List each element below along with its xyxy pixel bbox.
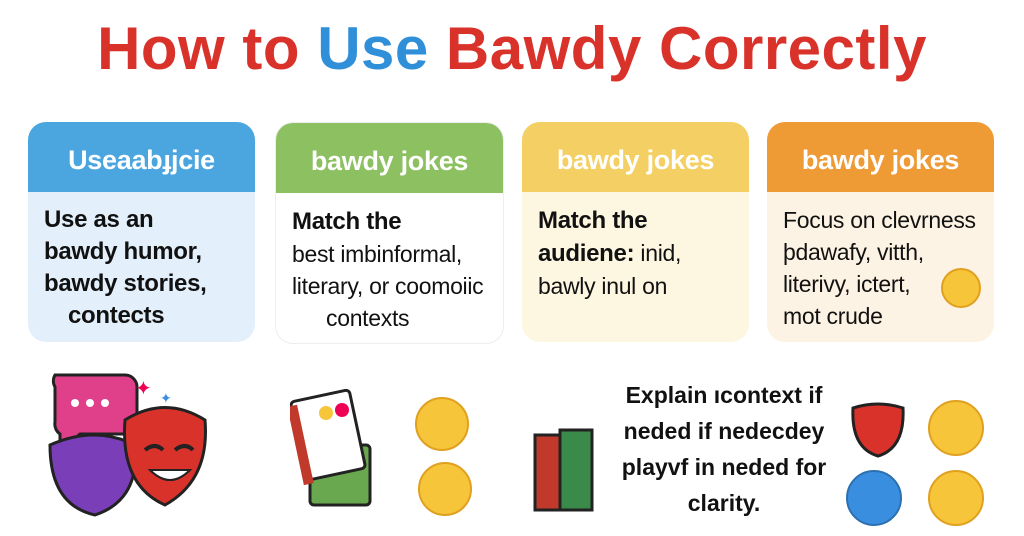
icon: laughing emoji — [928, 400, 984, 456]
text: explain: clarity. — [688, 490, 760, 516]
text: explain: neded if nedecdey — [624, 418, 824, 444]
icon: masks and speech bubble: ✦ — [160, 390, 172, 406]
text: yellow: Match the — [538, 207, 647, 234]
text: orange: mot crude — [783, 303, 883, 329]
text: green — [292, 208, 483, 331]
text: blue: Use as an — [44, 206, 153, 233]
text: orange — [783, 207, 976, 329]
text: green: contexts — [326, 305, 409, 331]
header: orange — [767, 122, 994, 192]
text: green: best imbinformal, — [292, 241, 462, 267]
icon: red mask — [851, 402, 905, 458]
text: blue: contects — [68, 302, 164, 329]
text: orange: Focus on clevrness — [783, 207, 976, 233]
icon: masks and speech bubble — [48, 374, 207, 516]
icon: emoji wink — [418, 462, 472, 516]
panel: audience — [522, 122, 749, 342]
panel: cleverness — [767, 122, 994, 342]
icon: emoji tear — [415, 397, 469, 451]
text: yellow: bawly inul on — [538, 273, 667, 299]
text: orange: literivy, ictert, — [783, 271, 910, 297]
icon: masks and speech bubble: ✦ — [135, 378, 152, 400]
text: green: Match the — [292, 208, 401, 235]
text: blue — [44, 206, 207, 329]
title: How to Use Bawdy Correctly — [97, 15, 927, 82]
text: explain: Explain ıcontext if — [626, 382, 822, 408]
text: blue: bawdy humor, — [44, 238, 202, 265]
icon: blue emoji — [846, 470, 902, 526]
header: yellow — [522, 122, 749, 192]
text: orange: þdawafy, vitth, — [783, 239, 924, 265]
text: green: literary, or coomoiic — [292, 273, 483, 299]
icon: grin emoji — [928, 470, 984, 526]
text: explain: playvf in neded for — [622, 454, 826, 480]
text: blue: bawdy stories, — [44, 270, 207, 297]
header: orange: bawdy jokes — [802, 145, 959, 175]
header: blue — [28, 122, 255, 192]
panel: use as — [28, 122, 255, 342]
text: yellow: audiene: inid, — [538, 240, 681, 267]
panel: match — [275, 122, 504, 344]
header: blue: Useaabɟjcie — [68, 145, 215, 175]
icon: books — [534, 428, 594, 512]
header: yellow: bawdy jokes — [557, 145, 714, 175]
icon: book and emojis — [290, 388, 372, 506]
icon: small emoji — [941, 268, 981, 308]
text: yellow — [538, 207, 681, 299]
text: explain — [622, 382, 826, 516]
header: green: bawdy jokes — [311, 146, 468, 176]
header: green — [276, 123, 503, 193]
